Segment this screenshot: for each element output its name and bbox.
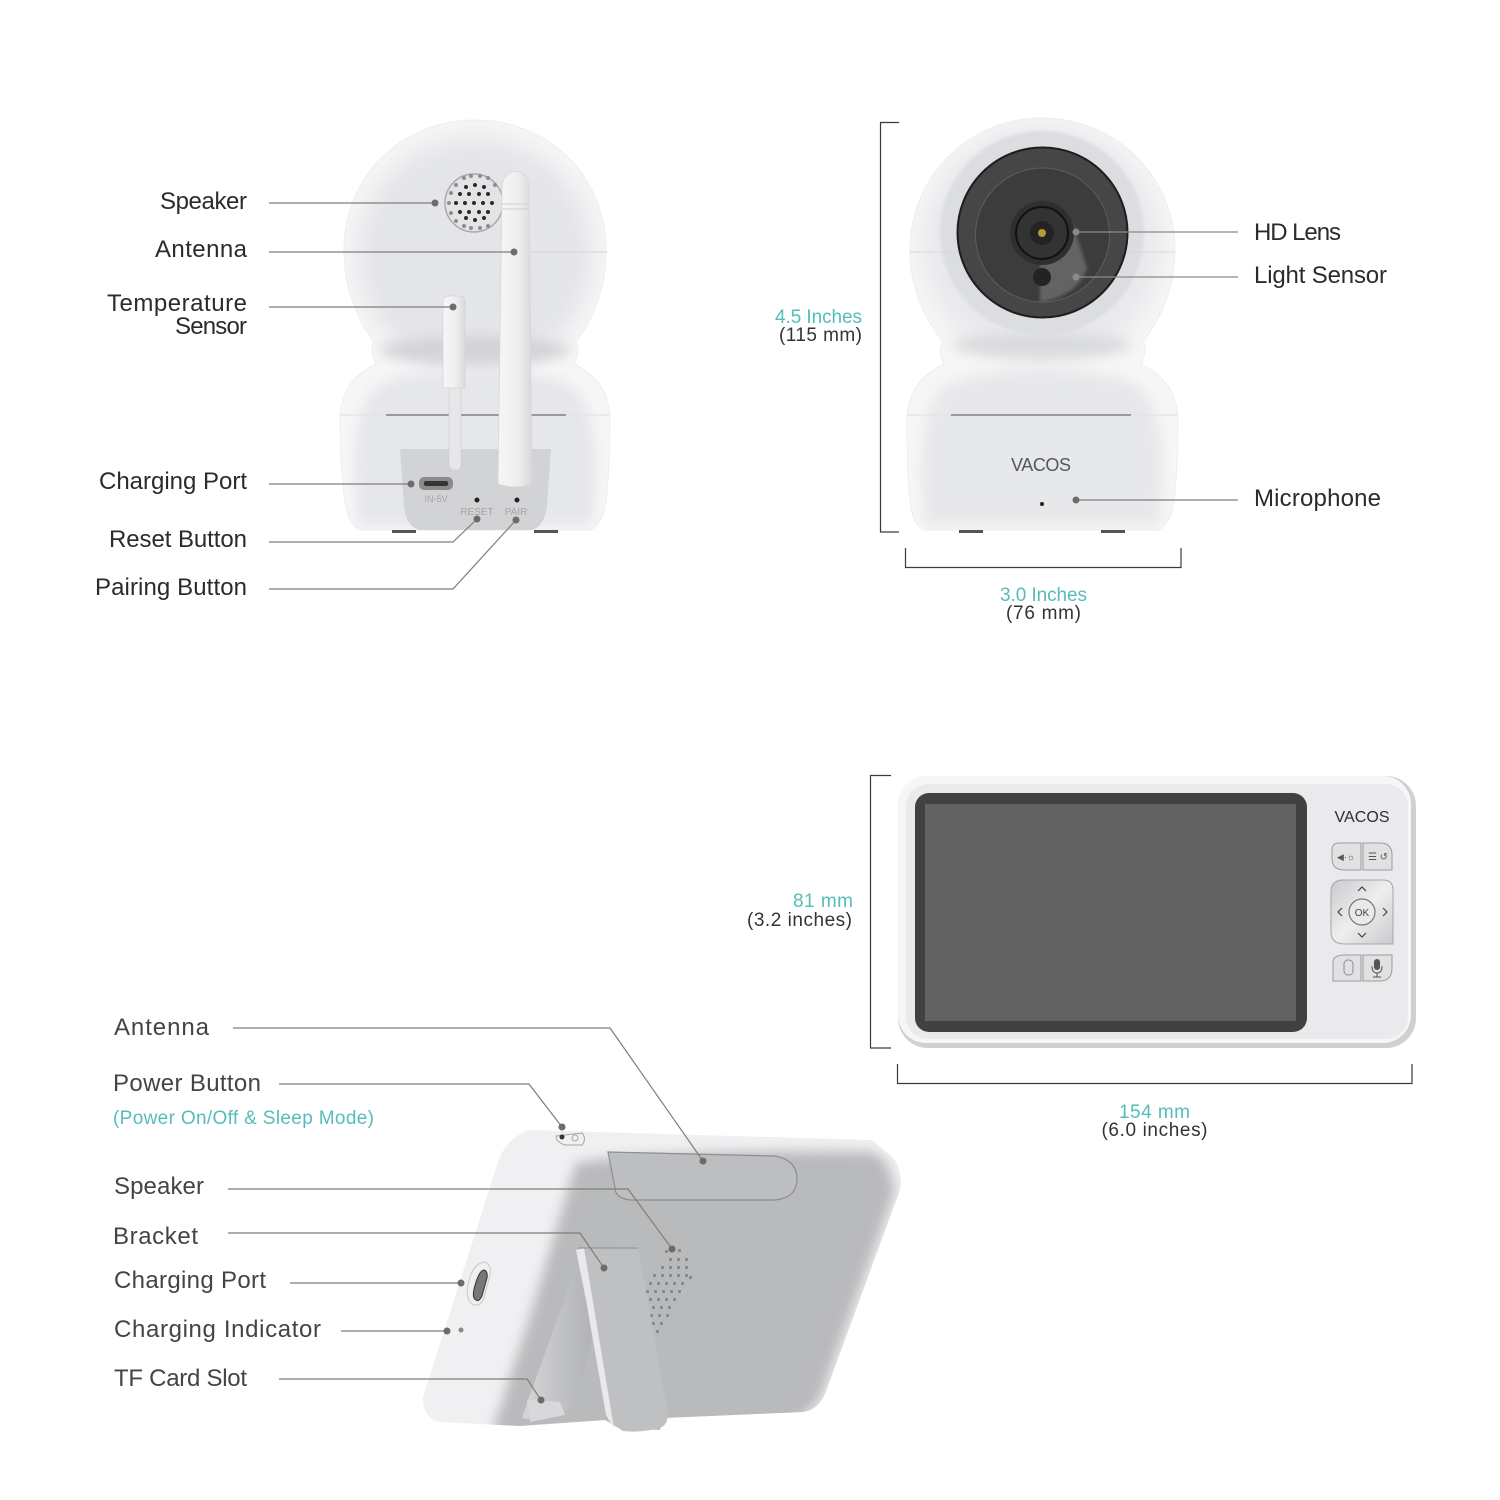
panel: camera front labels: [1072, 219, 1387, 512]
height bracket: [880, 122, 899, 532]
bracket stand: [522, 1247, 668, 1432]
microphone hole: [1040, 502, 1044, 506]
label: Pairing Button: Pairing Button: [95, 574, 247, 601]
width bracket: [906, 548, 1181, 568]
panel: monitor front view: [898, 776, 1416, 1048]
rear connector panel: IN-5V: [424, 494, 448, 504]
label: Power Button: (Power On/Off & Sleep Mode): [113, 1108, 374, 1129]
antenna: [498, 172, 532, 487]
rear connector panel: RESET: [460, 507, 494, 518]
width label: [1000, 585, 1087, 624]
panel: camera rear labels: [95, 188, 520, 601]
height label: 81 mm: [793, 891, 853, 912]
width label: [1102, 1102, 1208, 1141]
camera rear body: [340, 120, 610, 533]
height bracket: [870, 776, 891, 1048]
panel: camera rear view: [340, 120, 610, 533]
rear connector panel: PAIR: [505, 507, 527, 518]
label: Charging Indicator: Charging Indicator: [114, 1316, 321, 1343]
label: Power Button: Power Button: [113, 1070, 261, 1097]
label: Speaker: Speaker: [114, 1173, 204, 1200]
height label: 4.5 Inches: [775, 307, 862, 328]
label: Bracket: Bracket: [113, 1223, 198, 1250]
directional pad: OK: [1355, 908, 1370, 919]
height label: (3.2 inches): [747, 910, 852, 931]
label: Bracket: [113, 1223, 608, 1272]
label: Speaker: Speaker: [160, 188, 247, 215]
height label: (115 mm): [779, 325, 862, 346]
panel: monitor rear labels: [113, 1014, 706, 1404]
label: Antenna: Antenna: [114, 1014, 210, 1041]
height label: [775, 307, 862, 346]
label: Power Button: [113, 1070, 566, 1130]
camera front body: [907, 118, 1178, 533]
VACOS logo: VACOS: [1011, 455, 1071, 475]
width label: 154 mm: [1119, 1102, 1190, 1123]
label: Antenna: [155, 236, 518, 263]
top button pair: ◀·☼: [1337, 852, 1355, 862]
panel: monitor rear view: [423, 1130, 901, 1440]
monitor screen: [915, 793, 1307, 1032]
label: Microphone: [1072, 485, 1381, 512]
width label: 3.0 Inches: [1000, 585, 1087, 606]
label: Temperature Sensor: Temperature: [107, 290, 247, 317]
label: Charging Port: [99, 468, 414, 495]
camera lens assembly: [958, 148, 1128, 318]
label: HD Lens: HD Lens: [1254, 219, 1341, 246]
label: Temperature Sensor: [107, 290, 456, 340]
label: Charging Port: [114, 1267, 464, 1294]
panel: camera dimensions: [775, 122, 1181, 624]
label: TF Card Slot: [114, 1365, 544, 1404]
temperature sensor: [443, 296, 465, 470]
width bracket: [898, 1064, 1412, 1084]
directional pad: [1331, 880, 1393, 944]
charging indicator: [458, 1328, 464, 1332]
label: Speaker: [114, 1173, 676, 1252]
label: Pairing Button: [95, 516, 520, 601]
label: TF Card Slot: TF Card Slot: [114, 1365, 247, 1392]
bottom button pair: [1333, 955, 1392, 981]
charging port: [467, 1262, 490, 1305]
speaker holes: [646, 1249, 692, 1333]
panel: camera front view: [907, 118, 1178, 533]
top button pair: [1332, 843, 1392, 870]
monitor body: [898, 776, 1416, 1048]
top button pair: ☰ ↺: [1368, 852, 1388, 863]
label: Temperature Sensor: Sensor: [175, 313, 247, 340]
height label: [747, 891, 853, 931]
speaker grille: [445, 174, 503, 232]
width label: (76 mm): [1006, 603, 1081, 624]
label: Charging Port: Charging Port: [114, 1267, 266, 1294]
label: Reset Button: [109, 516, 480, 553]
label: Charging Port: Charging Port: [99, 468, 247, 495]
label: Reset Button: Reset Button: [109, 526, 247, 553]
label: Antenna: Antenna: [155, 236, 248, 263]
label: Antenna: [114, 1014, 706, 1164]
label: Microphone: Microphone: [1254, 485, 1381, 512]
VACOS logo: VACOS: [1334, 809, 1390, 826]
label: Light Sensor: [1072, 262, 1387, 289]
label: HD Lens: [1072, 219, 1341, 246]
label: Light Sensor: Light Sensor: [1254, 262, 1387, 289]
width label: (6.0 inches): [1102, 1120, 1208, 1141]
label: Charging Indicator: [114, 1316, 450, 1343]
monitor rear body: [423, 1130, 901, 1440]
rear connector panel: [400, 449, 551, 530]
label: Speaker: [160, 188, 438, 215]
panel: monitor dimensions: [747, 776, 1412, 1141]
